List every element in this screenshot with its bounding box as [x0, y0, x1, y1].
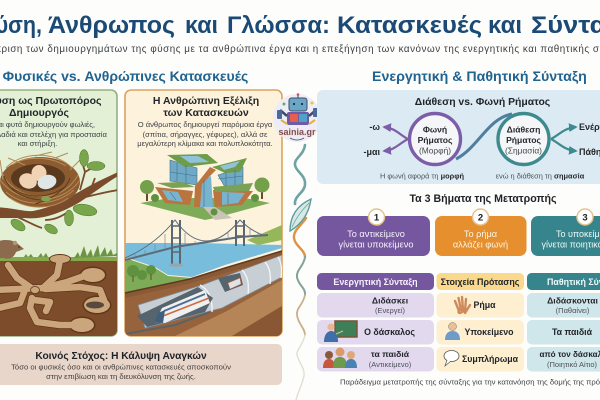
title [0, 12, 600, 39]
circle: verb voice: Φωνή [423, 124, 447, 134]
panel text: nature: και στήριξη. [18, 139, 57, 148]
step 1: 1 [374, 212, 380, 224]
panel: voice vs disposition [317, 90, 600, 184]
circle: verb voice: Ρήματος [418, 135, 453, 145]
icon: person [445, 322, 460, 340]
panel text: human: (σπίτια, σήραγγες, γέφυρες), αλλά σε [143, 130, 268, 139]
panel: human [125, 90, 282, 336]
step 2: Το ρήμα [464, 229, 498, 239]
table column: active syntax [317, 273, 434, 372]
table column: sentence elements: Συμπλήρωμα [462, 354, 519, 364]
icon: hand [455, 297, 470, 313]
callout text: στην επιβίωση και τη διευκόλυνση της ζωής. [46, 372, 196, 381]
title: και [185, 12, 218, 39]
table column: active syntax: Ο δάσκαλος [364, 327, 415, 337]
table column: sentence elements [436, 273, 524, 372]
title: Κατασκευές [337, 12, 482, 39]
circle: verb disposition [498, 114, 549, 164]
table column: passive syntax: (Ποιητικό Αίτιο) [547, 360, 598, 369]
arrows: disposition outcomes [551, 127, 576, 151]
callout: common goal [0, 344, 282, 385]
icon: children [323, 348, 357, 368]
heading: three steps: Τα 3 Βήματα της Μετατροπής [410, 193, 557, 205]
bridge scene [125, 243, 282, 277]
table column: passive syntax: Διδάσκονται [547, 296, 598, 306]
column header: passive [527, 273, 600, 290]
icon: speech bubble [444, 350, 459, 366]
decorative vine connecting panels [290, 145, 311, 400]
row: subject passive [527, 320, 600, 344]
step 1: Το αντικείμενο [347, 229, 405, 239]
step 2: αλλάζει φωνή [453, 240, 508, 250]
table column: passive syntax [527, 273, 600, 372]
circle: verb disposition: Διάθεση [507, 124, 540, 134]
panel: nature [0, 90, 119, 336]
column header: active [317, 273, 434, 290]
table column: sentence elements: Ρήμα [473, 300, 496, 310]
mouse [0, 240, 24, 259]
panel text: human: Ο άνθρωπος δημιουργεί παρόμοια έργα [138, 120, 273, 129]
caption: voice: Η φωνή αφορά τη μορφή [380, 172, 464, 180]
step 2: 2 [478, 212, 483, 224]
panel heading: human: Η Ανθρώπινη Εξέλιξη [153, 95, 259, 107]
step 1: γίνεται υποκείμενο [339, 240, 413, 250]
panel heading: human: των Κατασκευών [163, 107, 249, 119]
callout heading: Κοινός Στόχος: Η Κάλυψη Αναγκών [35, 351, 207, 362]
title: Γλώσσα: [227, 12, 330, 39]
caption: disposition: ενώ η διάθεση τη σημασία [496, 172, 585, 180]
diagram title: Διάθεση vs. Φωνή Ρήματος [415, 97, 550, 108]
illustration: bird nest on a branch [0, 150, 119, 336]
row: verb [436, 293, 524, 318]
column header: elements [436, 273, 524, 290]
heading: active and passive syntax: Ενεργητική & Παθητική Σύνταξη [372, 69, 587, 85]
row: verb passive [527, 293, 600, 318]
table column: active syntax: (Αντικείμενο) [369, 360, 412, 369]
row: verb active [317, 293, 434, 318]
ground and burrow [0, 260, 119, 336]
modern building [140, 154, 270, 220]
row: subject active [317, 320, 434, 344]
labels: endings and outcomes: -ω [369, 122, 380, 132]
step 2 [435, 209, 526, 256]
row: subject [436, 320, 524, 344]
title: Άνθρωπος [48, 12, 175, 39]
arrows: voice endings [384, 127, 408, 151]
row: object active [317, 347, 434, 372]
table column: active syntax: (Ενεργεί) [375, 306, 406, 315]
table column: passive syntax: Τα παιδιά [552, 327, 593, 337]
panel text: human: μεγαλύτερη κλίμακα και πολυπλοκότητα. [137, 139, 273, 148]
circle: verb voice: (Μορφή) [419, 146, 451, 156]
step 3: 3 [582, 212, 588, 224]
connector curve [456, 114, 512, 159]
labels: endings and outcomes [363, 122, 600, 157]
tunnel [138, 255, 282, 328]
step 3 [531, 209, 600, 256]
callout text: Τόσο οι φυσικές όσο και οι ανθρώπινες κατασκευές αποσκοπούν [11, 362, 231, 372]
circle: verb voice [410, 114, 460, 164]
row: agent passive [527, 347, 600, 372]
circle: verb disposition: Ρήματος [506, 135, 541, 145]
logo: robot mascot [273, 93, 321, 142]
title: και [488, 12, 522, 39]
labels: endings and outcomes: -μαι [363, 147, 380, 157]
illustration: building, bridge, tunnel and train [125, 154, 282, 336]
underground cross-section [125, 251, 282, 336]
logo text: sainia.gr [278, 127, 316, 137]
table column: active syntax: Ενεργητική Σύνταξη [333, 277, 418, 287]
table column: sentence elements: Υποκείμενο [464, 327, 514, 337]
table column: active syntax: Διδάσκει [372, 296, 409, 306]
table column: active syntax: τα παιδιά [371, 349, 410, 359]
icon: teacher and chalkboard [324, 321, 357, 342]
table column: sentence elements: Στοιχεία Πρότασης [441, 277, 520, 287]
table column: passive syntax: (Παθαίνει) [556, 306, 590, 315]
step 1 [317, 209, 430, 256]
row: complement [436, 347, 524, 372]
circle: verb disposition: (Σημασία) [505, 146, 542, 156]
panel heading: nature: Δημιουργός [9, 107, 70, 119]
